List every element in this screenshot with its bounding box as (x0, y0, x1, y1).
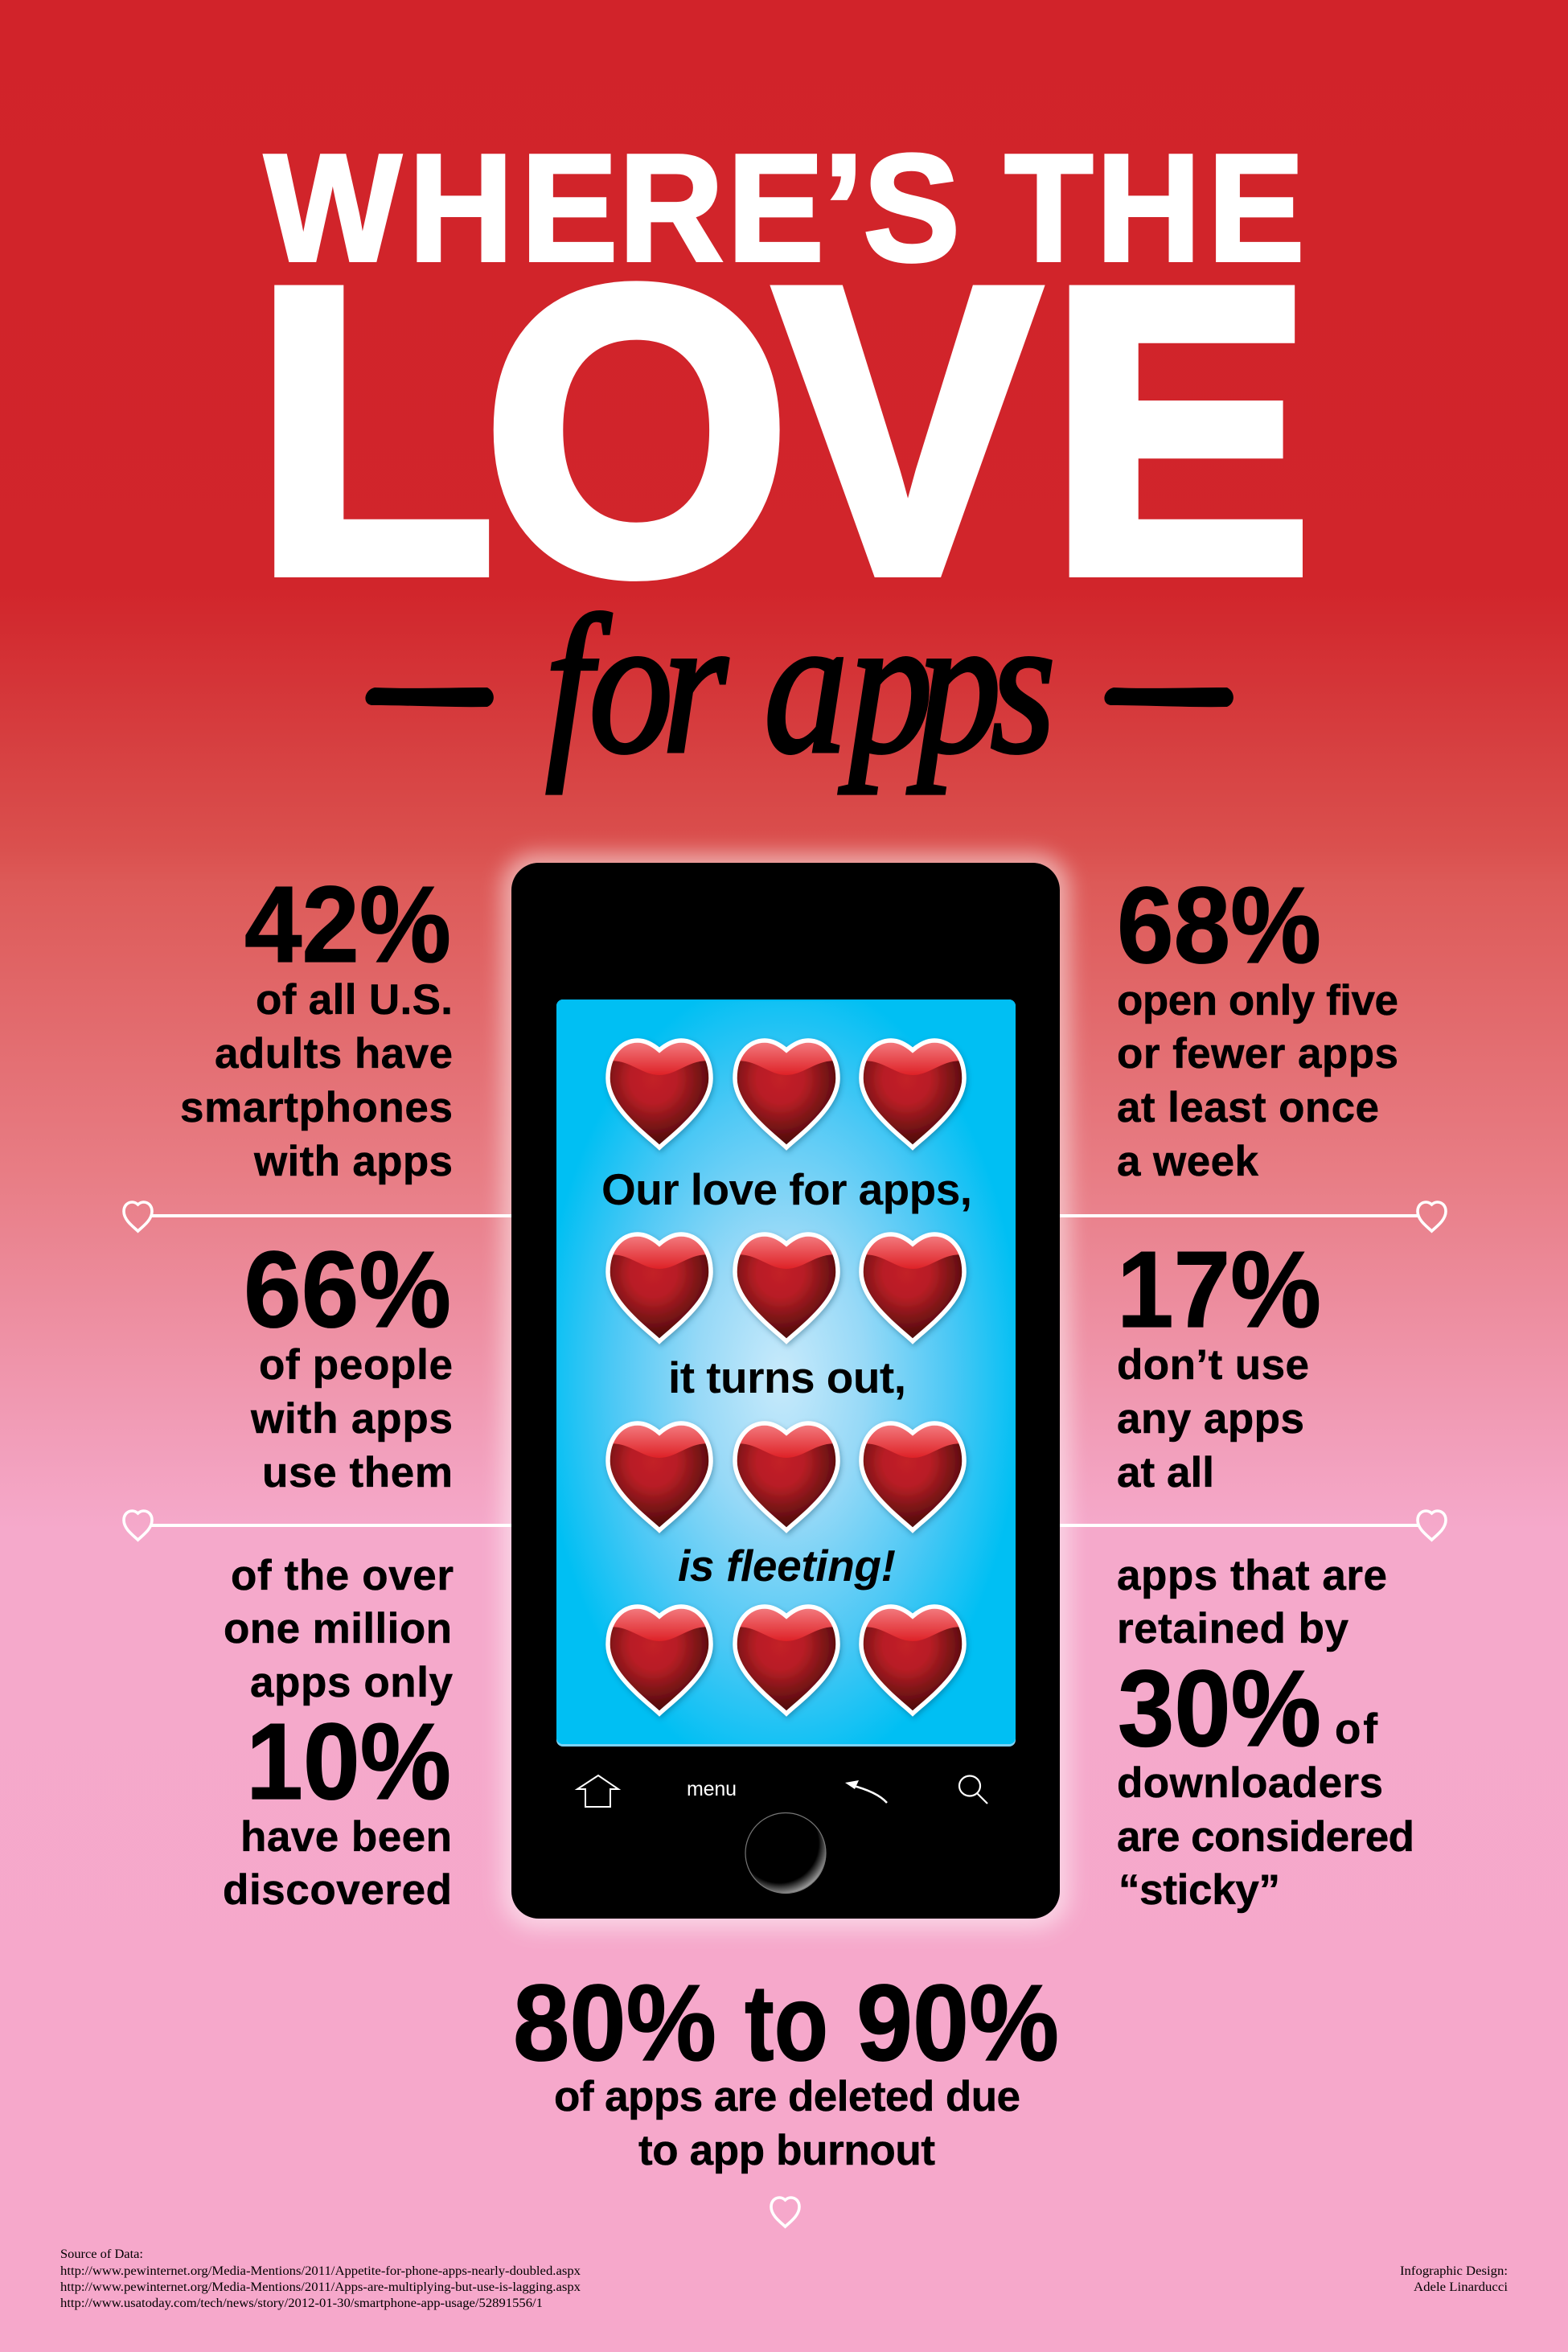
stat: 80% to 90%: to app burnout (638, 2127, 935, 2174)
stat: 10% (223, 1552, 454, 1914)
stat: 30%: retained by (1117, 1605, 1349, 1652)
stat: 68%: open only five (1117, 977, 1398, 1024)
title line: where's the: WHERE’S THE (265, 123, 1304, 293)
stat: 66%: use them (262, 1449, 453, 1496)
stat: 30%: 30% (1118, 1648, 1321, 1769)
heart row 4 (605, 1604, 967, 1714)
stat: 10%: of the over (231, 1552, 454, 1599)
title (254, 123, 1311, 658)
stat: 17%: don’t use (1117, 1341, 1309, 1389)
stat: 10%: 10% (246, 1701, 451, 1822)
stat: 68%: at least once (1117, 1084, 1379, 1131)
stat: 80% to 90%: to (745, 1962, 828, 2083)
script text: for apps (545, 576, 1056, 794)
stat: 66% (244, 1229, 453, 1496)
stat: 42%: 42% (244, 864, 451, 985)
stat: 30%: “sticky” (1119, 1866, 1280, 1914)
stat: 17% (1117, 1229, 1321, 1496)
sources: http://www.pewinternet.org/Media-Mentions/2011/Apps-are-multiplying-but-use-is-lagging.aspx (60, 2280, 581, 2294)
heart row 1 (605, 1038, 967, 1147)
menu label: menu (687, 1778, 737, 1800)
phone glow (502, 853, 1069, 1929)
stat: 10%: one million (224, 1605, 452, 1652)
heart row 2 (605, 1232, 967, 1341)
right lower connector (1060, 1511, 1446, 1540)
icon: home (577, 1775, 618, 1807)
icon: back arrow (845, 1780, 887, 1803)
right dash (1104, 688, 1233, 707)
stat: 42%: of all U.S. (256, 976, 453, 1024)
phone (502, 853, 1069, 1929)
phone screen (556, 999, 1016, 1747)
stat: 10%: apps only (250, 1659, 454, 1706)
hearts grid (605, 1038, 967, 1714)
stat: 68%: a week (1117, 1138, 1259, 1185)
home button (745, 1812, 826, 1893)
left lower connector (124, 1511, 511, 1540)
heart row 3 (605, 1421, 967, 1530)
stat: 80% to 90%: 90% (856, 1962, 1059, 2083)
stat: 30%: apps that are (1117, 1552, 1387, 1599)
screen text 2: it turns out, (668, 1353, 906, 1402)
design credit: Adele Linarducci (1414, 2280, 1508, 2294)
subtitle: for apps (365, 576, 1233, 794)
stat: 66%: 66% (244, 1229, 451, 1350)
stat: 17%: 17% (1117, 1229, 1321, 1350)
stat: 66%: of people (259, 1341, 453, 1389)
stat: 42%: adults have (215, 1030, 453, 1077)
icon: outline heart (771, 2198, 799, 2227)
left dash (365, 688, 494, 707)
right upper connector (1060, 1202, 1446, 1231)
stat: 66%: with apps (250, 1395, 453, 1443)
divider lines with hearts (124, 1202, 1446, 1540)
sources: http://www.usatoday.com/tech/news/story/2012-01-30/smartphone-app-usage/52891556/1 (60, 2297, 543, 2310)
design credit: Infographic Design: (1400, 2264, 1508, 2278)
stat: 30%: downloaders (1117, 1759, 1383, 1807)
stat: 17%: any apps (1117, 1395, 1304, 1443)
sources: http://www.pewinternet.org/Media-Mentions/2011/Appetite-for-phone-apps-nearly-doubled.aspx (60, 2264, 581, 2278)
stat: 42%: smartphones (180, 1084, 453, 1131)
icon: search (959, 1775, 987, 1804)
stat: 30%: are considered (1117, 1813, 1414, 1861)
sources: Source of Data: (60, 2247, 143, 2261)
stat: 68% (1117, 864, 1398, 1185)
stat: 10%: discovered (223, 1866, 452, 1914)
title line: love: LOVE (254, 204, 1311, 658)
design credit (1400, 2264, 1508, 2294)
screen text 1: Our love for apps, (601, 1164, 972, 1214)
stat: 80% to 90%: 80% (513, 1962, 716, 2083)
sources (60, 2247, 581, 2310)
stat: 68%: 68% (1117, 864, 1321, 986)
stat: 68%: or fewer apps (1117, 1030, 1398, 1077)
stat: 80% to 90%: of apps are deleted due (554, 2073, 1020, 2120)
stat: 42%: with apps (253, 1138, 453, 1185)
stat: 42% (180, 864, 453, 1185)
stat: 80% to 90% (513, 1962, 1059, 2227)
stat: 17%: at all (1117, 1449, 1214, 1496)
screen text 3: is fleeting! (678, 1541, 896, 1591)
stat: 10%: have been (240, 1813, 452, 1861)
stat: 30% (1117, 1552, 1414, 1914)
stat: 30%: of (1335, 1706, 1377, 1753)
left upper connector (124, 1202, 511, 1231)
phone body (511, 863, 1060, 1919)
